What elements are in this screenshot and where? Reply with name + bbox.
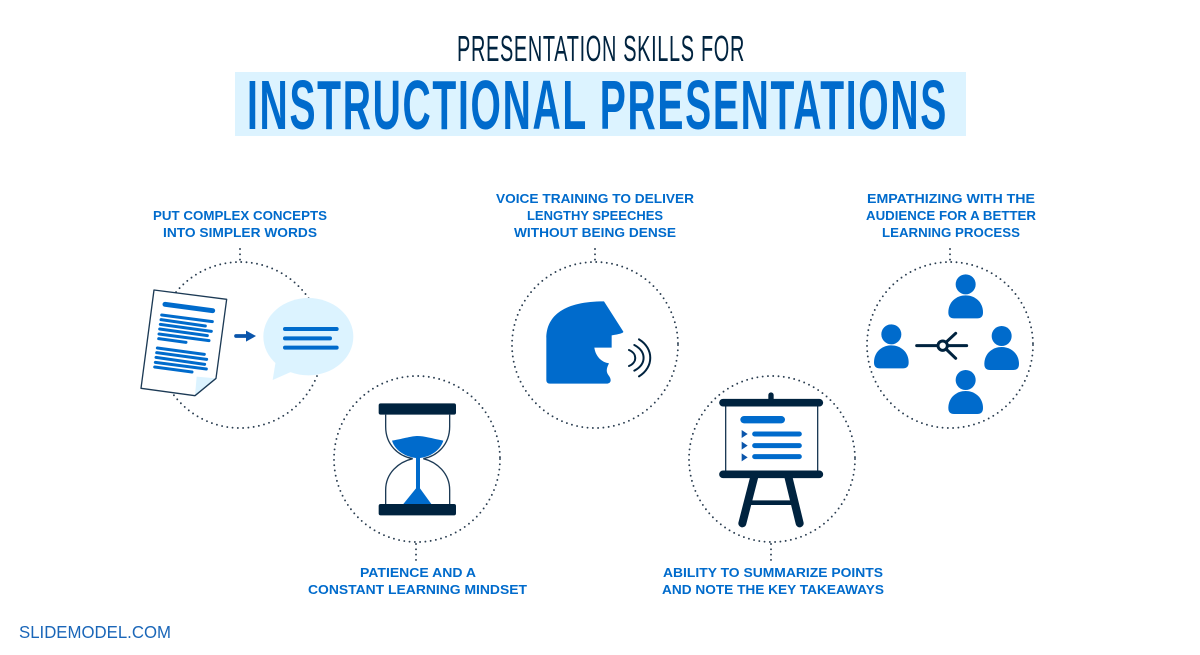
label: empathizing: AUDIENCE FOR A BETTER xyxy=(866,208,1037,223)
dotted circle: summarize xyxy=(689,376,855,562)
icon: audience people xyxy=(874,274,1019,414)
label: simpler words xyxy=(153,208,327,240)
label: summarize xyxy=(662,565,884,597)
label: empathizing xyxy=(866,191,1037,240)
head xyxy=(546,301,623,384)
person left xyxy=(874,324,909,368)
label: simpler words: INTO SIMPLER WORDS xyxy=(163,225,317,240)
board xyxy=(726,403,818,474)
label: empathizing: LEARNING PROCESS xyxy=(882,225,1020,240)
person bottom xyxy=(948,370,983,414)
title highlight band xyxy=(235,72,966,136)
title line one: PRESENTATION SKILLS FOR xyxy=(457,28,745,69)
icon: document to speech bubble xyxy=(141,290,353,396)
glass outline xyxy=(386,415,450,504)
label: voice training: VOICE TRAINING TO DELIVER xyxy=(496,191,695,206)
top and bottom caps xyxy=(379,403,456,515)
dotted circle: simpler words xyxy=(157,249,323,428)
label: simpler words: PUT COMPLEX CONCEPTS xyxy=(153,208,327,223)
arrow xyxy=(236,331,256,342)
bullet list xyxy=(742,420,799,461)
board rails xyxy=(723,403,819,474)
icon: hourglass xyxy=(379,403,456,515)
label: voice training xyxy=(496,191,695,240)
sand xyxy=(392,436,443,504)
person top xyxy=(948,274,983,318)
dotted circle: empathizing xyxy=(867,249,1033,428)
document xyxy=(141,290,227,396)
label: patience xyxy=(308,565,527,597)
footer brand: SLIDEMODEL.COM xyxy=(19,622,171,642)
icon: speaking head xyxy=(546,301,650,384)
label: empathizing: EMPATHIZING WITH THE xyxy=(867,191,1035,206)
dotted circle: patience xyxy=(334,376,500,562)
icon: presentation easel xyxy=(723,395,819,523)
person right xyxy=(984,326,1019,370)
sound waves xyxy=(629,339,650,376)
label: voice training: LENGTHY SPEECHES xyxy=(527,208,663,223)
speech bubble xyxy=(263,298,353,380)
title xyxy=(235,28,966,144)
label: summarize: ABILITY TO SUMMARIZE POINTS xyxy=(663,565,883,580)
label: voice training: WITHOUT BEING DENSE xyxy=(514,225,676,240)
label: patience: CONSTANT LEARNING MINDSET xyxy=(308,582,527,597)
label: patience: PATIENCE AND A xyxy=(360,565,477,580)
dotted circle: voice training xyxy=(512,249,678,428)
legs xyxy=(742,477,800,523)
label: summarize: AND NOTE THE KEY TAKEAWAYS xyxy=(662,582,884,597)
connector node xyxy=(917,333,967,358)
